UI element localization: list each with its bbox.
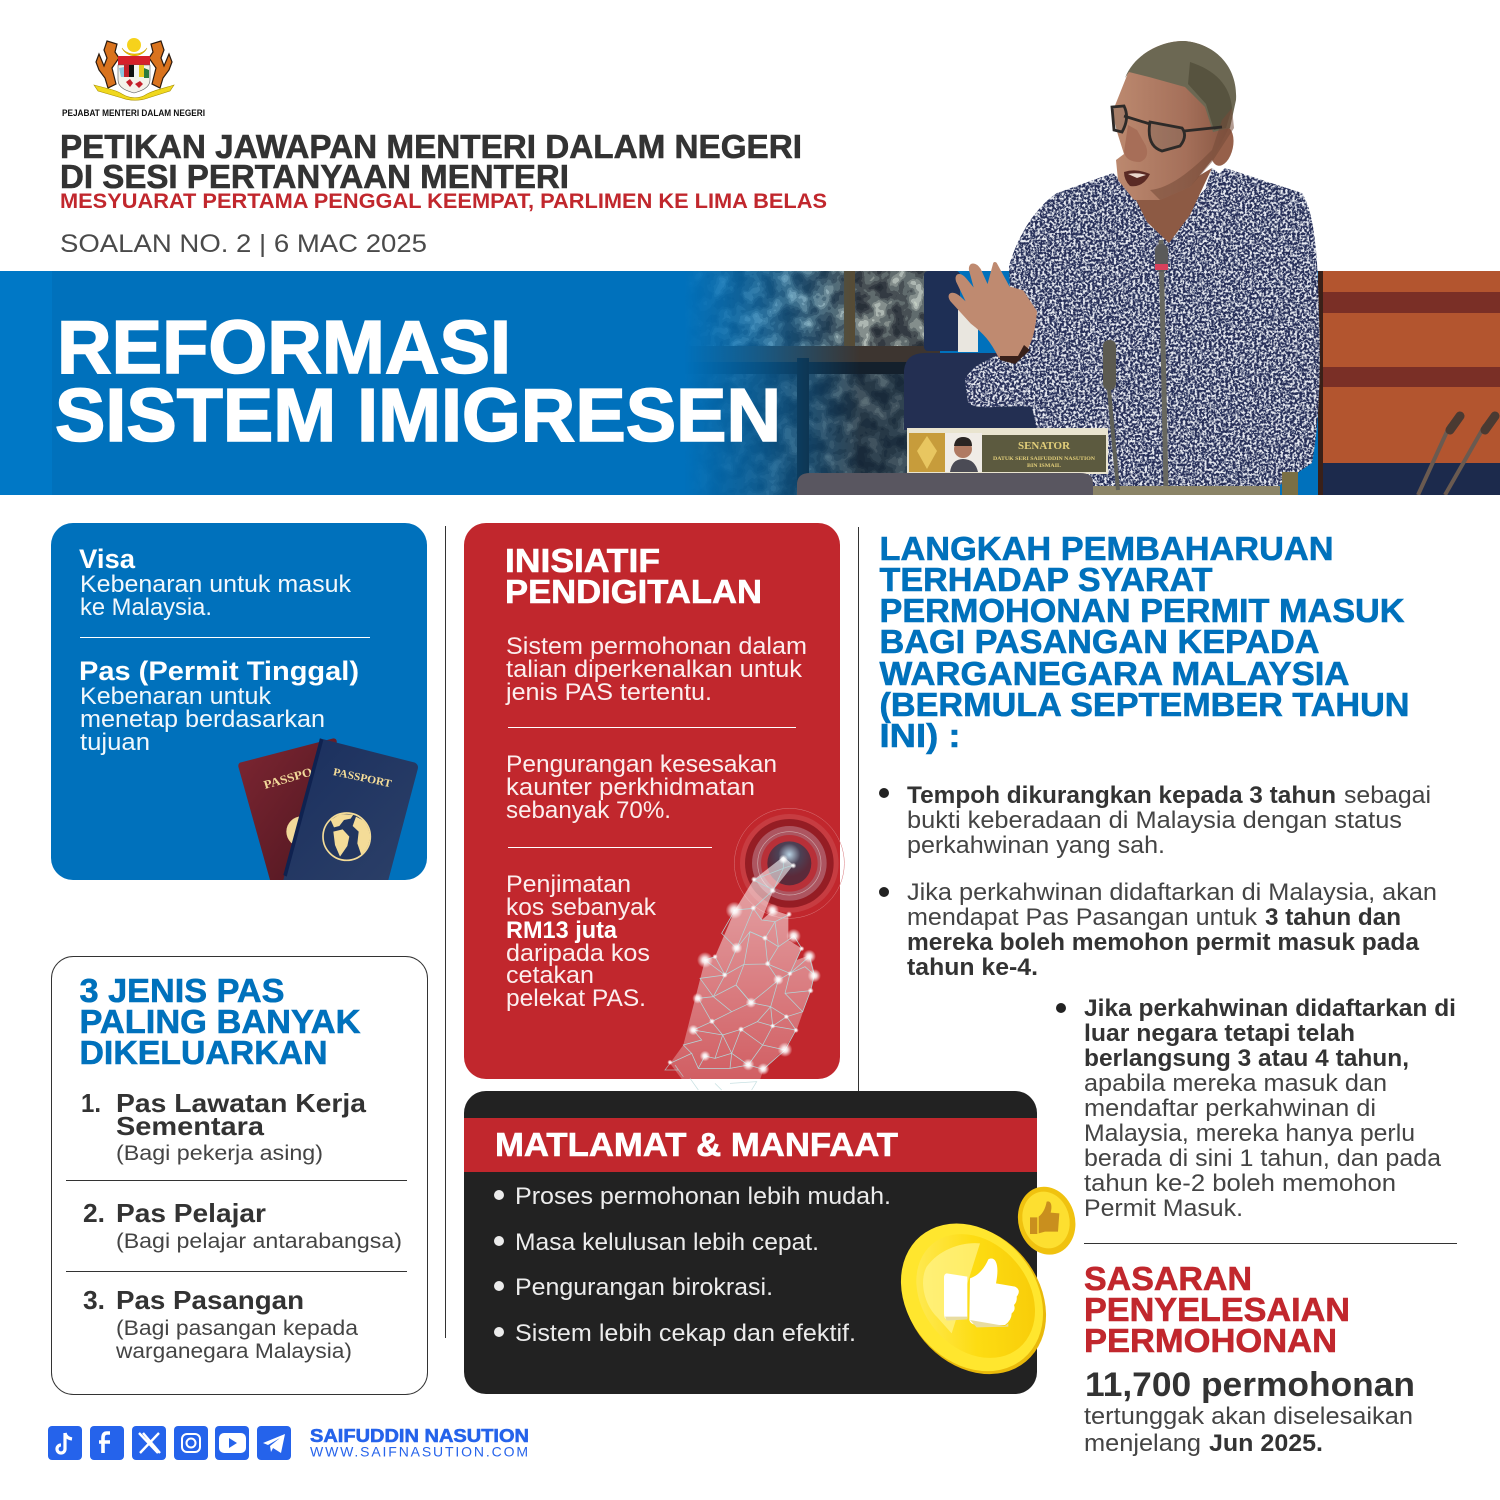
icon: passports [238, 738, 418, 880]
title: SISTEM IMIGRESEN [55, 373, 781, 457]
key number: 11,700 permohonan [1085, 1366, 1415, 1404]
background microphones [1418, 425, 1485, 495]
section: completion target: Jun 2025. [1209, 1430, 1323, 1457]
icon: passports: PASSPO [262, 765, 314, 792]
list: Pengurangan birokrasi. [515, 1274, 773, 1301]
heading: PENDIGITALAN [505, 573, 762, 610]
pas definition [79, 656, 359, 756]
visa definition: Visa [79, 544, 136, 574]
icon: digital hand touching target [665, 808, 844, 1090]
glasses [1112, 106, 1222, 151]
icon: passports: PASSPORT [332, 766, 393, 790]
hair [1125, 41, 1236, 132]
point 3: Penjimatan [506, 871, 631, 898]
point 3: daripada kos [506, 940, 650, 967]
item 2: (Bagi pelajar antarabangsa) [116, 1230, 402, 1253]
desk microphone [1105, 345, 1118, 490]
section: reform steps heading: PERMOHONAN PERMIT MASUK [880, 592, 1405, 629]
footer: name and website: WWW.SAIFNASUTION.COM [310, 1444, 528, 1460]
bullet: three-year period: bukti keberadaan di Malaysia dengan status [907, 807, 1402, 834]
ear [1207, 124, 1237, 168]
point 2 [506, 751, 777, 824]
nameplate: SENATOR [1018, 441, 1070, 452]
pas definition: Kebenaran untuk [80, 683, 272, 710]
footer: social icons [48, 1426, 291, 1460]
logo: ministry crest [62, 38, 205, 119]
nameplate: BIN ISMAIL [1027, 463, 1061, 469]
point 3: RM13 juta [506, 917, 618, 944]
bullet: three-year period: sebagai [1344, 782, 1431, 809]
item 1: (Bagi pekerja asing) [116, 1142, 323, 1165]
vertical divider right [858, 527, 859, 1091]
list: Sistem lebih cekap dan efektif. [515, 1320, 856, 1347]
section: completion target [1084, 1260, 1415, 1457]
point 2: sebanyak 70%. [506, 797, 671, 824]
section: reform steps heading [880, 530, 1410, 754]
item 3 [83, 1285, 358, 1363]
heading: DIKELUARKAN [80, 1034, 328, 1071]
header heading: SOALAN NO. 2 | 6 MAC 2025 [60, 230, 427, 258]
footer: name and website: SAIFUDDIN NASUTION [310, 1425, 529, 1446]
point 1: talian diperkenalkan untuk [506, 656, 803, 683]
section: reform steps heading: (BERMULA SEPTEMBER TAHUN [880, 686, 1410, 723]
bullet: registered in Malaysia: Jika perkahwinan didaftarkan di Malaysia, akan [907, 879, 1437, 906]
bullet: three-year period: perkahwinan yang sah. [907, 832, 1165, 859]
heading: 3 JENIS PAS [80, 972, 284, 1009]
section: completion target: PERMOHONAN [1084, 1322, 1337, 1359]
section: completion target: menjelang [1084, 1430, 1201, 1457]
bullet: registered in Malaysia: mendapat Pas Pasangan untuk [907, 904, 1258, 931]
header heading [60, 128, 827, 258]
item 3: (Bagi pasangan kepada [116, 1317, 358, 1340]
desk [797, 340, 1280, 495]
face details [1124, 170, 1150, 186]
item 2: 2. [83, 1198, 105, 1228]
section: reform steps heading: INI) : [880, 717, 960, 754]
point 2: Pengurangan kesesakan [506, 751, 777, 778]
point 3 [506, 871, 657, 1012]
point 1: Sistem permohonan dalam [506, 633, 807, 660]
bullet: registered overseas: Permit Masuk. [1084, 1195, 1243, 1222]
list: Masa kelulusan lebih cepat. [515, 1229, 819, 1256]
bullet: registered in Malaysia [879, 879, 1437, 981]
section: completion target: SASARAN [1084, 1260, 1252, 1297]
item 1: Sementara [116, 1111, 265, 1141]
item 3: warganegara Malaysia) [115, 1340, 352, 1363]
section: reform steps heading: BAGI PASANGAN KEPADA [880, 623, 1320, 660]
bullet: registered overseas [1056, 995, 1456, 1222]
icon: thumbs-up coins [872, 1180, 1083, 1403]
heading: PALING BANYAK [80, 1003, 361, 1040]
bullet: registered overseas: berada di sini 1 tahun, dan pada [1084, 1145, 1442, 1172]
neck [1132, 168, 1212, 243]
title [55, 305, 781, 457]
item 3: Pas Pasangan [116, 1285, 304, 1315]
section: completion target: tertunggak akan diselesaikan [1084, 1403, 1413, 1430]
speaker microphone [1161, 240, 1166, 490]
list: Proses permohonan lebih mudah. [515, 1183, 891, 1210]
section: reform steps heading: LANGKAH PEMBAHARUAN [880, 530, 1334, 567]
bullet: registered overseas: berlangsung 3 atau 4 tahun, [1084, 1045, 1409, 1072]
point 3: cetakan [506, 962, 594, 989]
bullet: registered overseas: apabila mereka masuk dan [1084, 1070, 1387, 1097]
item 3: 3. [83, 1285, 105, 1315]
panel: definitions [51, 523, 427, 880]
panel: digitalisation [464, 523, 840, 1079]
nameplate [907, 428, 1108, 474]
chairs [924, 271, 960, 351]
visa definition: Kebenaran untuk masuk [80, 571, 352, 598]
bullet: registered overseas: tahun ke-2 boleh memohon [1084, 1170, 1396, 1197]
visa definition [79, 544, 352, 621]
nameplate: DATUK SERI SAIFUDDIN NASUTION [993, 456, 1095, 462]
visa definition: ke Malaysia. [80, 594, 212, 621]
bullet: registered overseas: Malaysia, mereka hanya perlu [1084, 1120, 1415, 1147]
pas definition: tujuan [80, 729, 150, 756]
bullet: registered overseas: mendaftar perkahwinan di [1084, 1095, 1376, 1122]
list [494, 1183, 891, 1347]
heading [80, 972, 361, 1071]
header heading: DI SESI PERTANYAAN MENTERI [60, 158, 569, 195]
panel: goals and benefits [464, 1091, 1037, 1394]
point 3: kos sebanyak [506, 894, 657, 921]
item 2 [83, 1198, 402, 1253]
vertical divider left [445, 526, 446, 1338]
hand [951, 264, 1035, 356]
header heading: MESYUARAT PERTAMA PENGGAL KEEMPAT, PARLIMEN KE LIMA BELAS [60, 190, 827, 213]
title: REFORMASI [57, 305, 511, 389]
heading: INISIATIF [505, 542, 660, 579]
section: reform steps heading: TERHADAP SYARAT [880, 561, 1212, 598]
item 1 [81, 1088, 367, 1165]
point 1 [505, 633, 807, 706]
section: completion target: PENYELESAIAN [1084, 1291, 1350, 1328]
bullet: registered in Malaysia: tahun ke-4. [907, 954, 1038, 981]
minister photo [951, 41, 1320, 495]
bullet: three-year period [879, 782, 1431, 859]
heading [505, 542, 762, 610]
hero banner with photo [0, 271, 1500, 495]
background wood panel [1323, 271, 1500, 463]
point 1: jenis PAS tertentu. [505, 679, 712, 706]
item 1: 1. [81, 1088, 101, 1118]
panel: three pass types [52, 956, 428, 1394]
section: reform steps heading: WARGANEGARA MALAYSIA [880, 655, 1350, 692]
footer: name and website [310, 1425, 529, 1460]
item 1: Pas Lawatan Kerja [116, 1088, 367, 1118]
pas definition: Pas (Permit Tinggal) [79, 656, 359, 686]
logo caption: PEJABAT MENTERI DALAM NEGERI [62, 108, 205, 119]
bullet: registered overseas: luar negara tetapi telah [1084, 1020, 1355, 1047]
point 2: kaunter perkhidmatan [506, 774, 755, 801]
header heading: PETIKAN JAWAPAN MENTERI DALAM NEGERI [60, 128, 802, 165]
item 2: Pas Pelajar [116, 1198, 266, 1228]
pas definition: menetap berdasarkan [80, 706, 325, 733]
bullet: registered in Malaysia: mereka boleh memohon permit masuk pada [907, 929, 1420, 956]
bullet: three-year period: Tempoh dikurangkan kepada 3 tahun [907, 782, 1336, 809]
heading: MATLAMAT & MANFAAT [495, 1126, 898, 1163]
point 3: pelekat PAS. [506, 985, 646, 1012]
bullet: registered in Malaysia: 3 tahun dan [1265, 904, 1401, 931]
bullet: registered overseas: Jika perkahwinan didaftarkan di [1084, 995, 1456, 1022]
head [1112, 41, 1234, 200]
